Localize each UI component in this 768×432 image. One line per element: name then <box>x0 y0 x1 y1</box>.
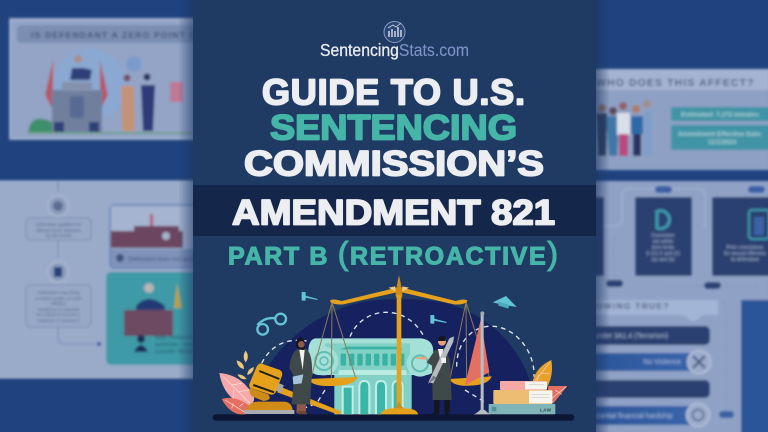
scales <box>308 275 492 415</box>
panel: flowchart right preview: under 3A1.4 (Terrorism) <box>594 333 668 340</box>
logo wordmark: SentencingStats.com <box>320 40 469 60</box>
ground line <box>213 414 574 421</box>
band: amendment highlight <box>193 185 596 236</box>
panel: flowchart right preview: stantial financial hardship <box>594 413 673 420</box>
panel: flowchart right preview: No Violence <box>643 359 681 366</box>
panel: flowchart left preview: Defendant may bring <box>38 290 80 295</box>
panel: flowchart right preview: OWING TRUE? <box>596 301 670 311</box>
large gavel <box>244 363 342 415</box>
panel: flowchart right preview: Conviction <box>651 233 675 239</box>
panel: flowchart left preview: reduction in sentence <box>37 318 80 323</box>
shadow: right of center panel <box>596 0 610 432</box>
title: SENTENCING <box>270 108 517 148</box>
title: COMMISSION’S <box>244 144 544 184</box>
title: GUIDE TO U.S. <box>262 72 525 112</box>
panel: flowchart left preview: be critical to receive a <box>37 312 81 317</box>
man lawyer <box>416 336 454 414</box>
panel: flowchart left preview: 3582(c) <box>51 301 67 306</box>
title: AMENDMENT 821 <box>232 194 555 232</box>
panel: flowchart left preview: offense-level reduction <box>36 228 82 233</box>
title <box>232 72 555 232</box>
panel: who does this affect preview: WHO DOES THIS AFFECT? <box>596 77 755 89</box>
panel: flowchart left preview: Sentence is reduced <box>38 307 80 312</box>
panel: flowchart right preview: for sexual offenses <box>724 251 766 257</box>
stack of books <box>489 381 555 414</box>
panel: flowchart right preview: not within <box>652 239 674 245</box>
panel: flowchart right preview: Prior convictions <box>727 245 764 251</box>
panel: flowchart left preview: by two levels <box>46 233 72 238</box>
flag <box>465 311 492 415</box>
icon: graduation cap <box>493 296 517 309</box>
panel: flowchart right preview: § 2J1.6 and (2) <box>646 251 680 257</box>
panel: flowchart left preview: Note: Reduction <box>155 335 194 341</box>
panel: flowchart left preview: consider 3553(a) <box>155 349 196 355</box>
panel: flowchart left preview: Defendant does not qualify <box>128 257 199 263</box>
panel: who does this affect preview <box>590 69 768 170</box>
icon: small gavel right <box>430 315 447 324</box>
shadow: left of center panel <box>178 0 193 432</box>
panel: flowchart right preview: (a) and (b) <box>651 257 675 263</box>
stack of books: LAW <box>540 407 552 412</box>
panel: flowchart left preview <box>0 181 202 378</box>
panel: zero point offender preview <box>10 19 246 139</box>
panel: who does this affect preview: Amendment Effective Date: <box>678 131 762 138</box>
panel: who does this affect preview: 11/1/2024 <box>708 139 737 146</box>
panel: flowchart right preview <box>585 181 768 432</box>
subtitle: PART B (RETROACTIVE) <box>228 236 558 272</box>
panel: flowchart left preview: automatic - must <box>155 342 196 348</box>
panel: flowchart right preview: time limits <box>652 245 675 251</box>
panel: zero point offender preview: IS DEFENDANT A ZERO POINT OFFENDER <box>31 30 246 40</box>
icon: logo <box>384 22 405 42</box>
panel: flowchart left preview: Defendant qualifies for <box>36 222 82 227</box>
illustration: justice scene <box>213 275 574 421</box>
woman lawyer <box>289 337 312 414</box>
leaves left <box>219 351 255 415</box>
column <box>308 338 433 415</box>
panel: who does this affect preview: Estimated: 7,272 Inmates <box>681 112 759 118</box>
dashed arcs <box>262 312 534 411</box>
icon: spectacles <box>257 314 286 335</box>
icon: small gavel left <box>302 292 318 301</box>
panel: flowchart right preview: to defendant <box>731 257 760 263</box>
dome backdrop <box>252 299 537 415</box>
leaves right <box>533 360 567 403</box>
center panel <box>193 0 596 432</box>
panel: flowchart left preview: a motion under 18 USC <box>35 296 83 301</box>
